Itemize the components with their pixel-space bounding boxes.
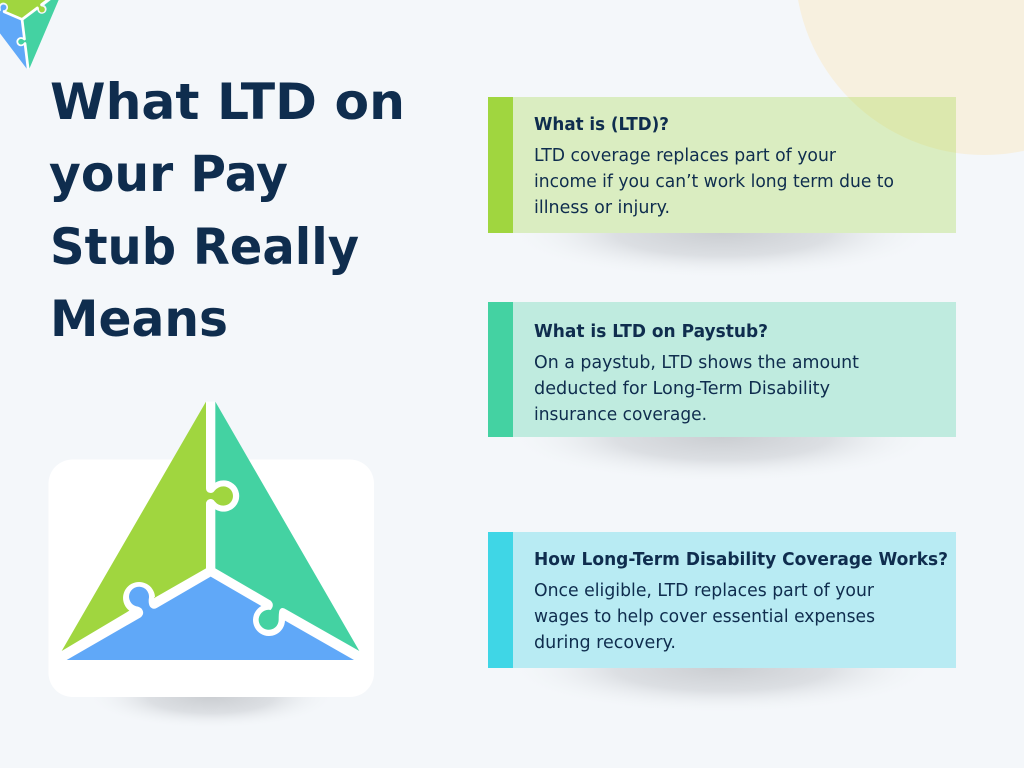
heading: How Long-Term Disability Coverage Works? bbox=[534, 549, 948, 570]
panel: How Long-Term Disability Coverage Works? bbox=[488, 532, 956, 668]
shadow: card 3 bbox=[570, 668, 874, 700]
body text: during recovery. bbox=[534, 633, 676, 653]
accent bar: cyan bbox=[488, 532, 513, 668]
heading: What is (LTD)? bbox=[534, 114, 669, 135]
shadow: illustration card bbox=[122, 697, 300, 720]
body text: LTD coverage replaces part of your bbox=[534, 146, 837, 166]
accent bar: green bbox=[488, 97, 513, 233]
body text: income if you can’t work long term due to bbox=[534, 172, 894, 192]
panel: illustration card bbox=[48, 460, 374, 697]
puzzle piece: teal bbox=[215, 402, 359, 651]
body text: On a paystub, LTD shows the amount bbox=[534, 353, 859, 373]
body text: wages to help cover essential expenses bbox=[534, 607, 875, 627]
shadow: card 1 bbox=[570, 233, 874, 266]
body text: deducted for Long-Term Disability bbox=[534, 379, 830, 399]
puzzle piece: blue bbox=[67, 577, 354, 660]
body text bbox=[534, 581, 875, 653]
panel: What is LTD on Paystub? bbox=[488, 302, 956, 437]
title: Means bbox=[50, 290, 228, 348]
body text bbox=[534, 146, 894, 218]
title: Stub Really bbox=[50, 218, 359, 276]
decorative circle: top right bbox=[795, 0, 1024, 155]
body text: insurance coverage. bbox=[534, 405, 707, 425]
title: your Pay bbox=[49, 145, 288, 203]
body text: Once eligible, LTD replaces part of your bbox=[534, 581, 875, 601]
body text: illness or injury. bbox=[534, 198, 670, 218]
body text bbox=[534, 353, 859, 425]
icon: small puzzle triangle, top left bbox=[0, 0, 71, 74]
icon: three-piece puzzle triangle bbox=[62, 402, 359, 660]
puzzle piece: green bbox=[62, 402, 233, 651]
accent bar: teal bbox=[488, 302, 513, 437]
title: What LTD on bbox=[50, 73, 405, 131]
title bbox=[49, 73, 405, 348]
panel: What is (LTD)? bbox=[488, 97, 956, 233]
shadow: card 2 bbox=[570, 437, 874, 470]
heading: What is LTD on Paystub? bbox=[534, 321, 768, 342]
